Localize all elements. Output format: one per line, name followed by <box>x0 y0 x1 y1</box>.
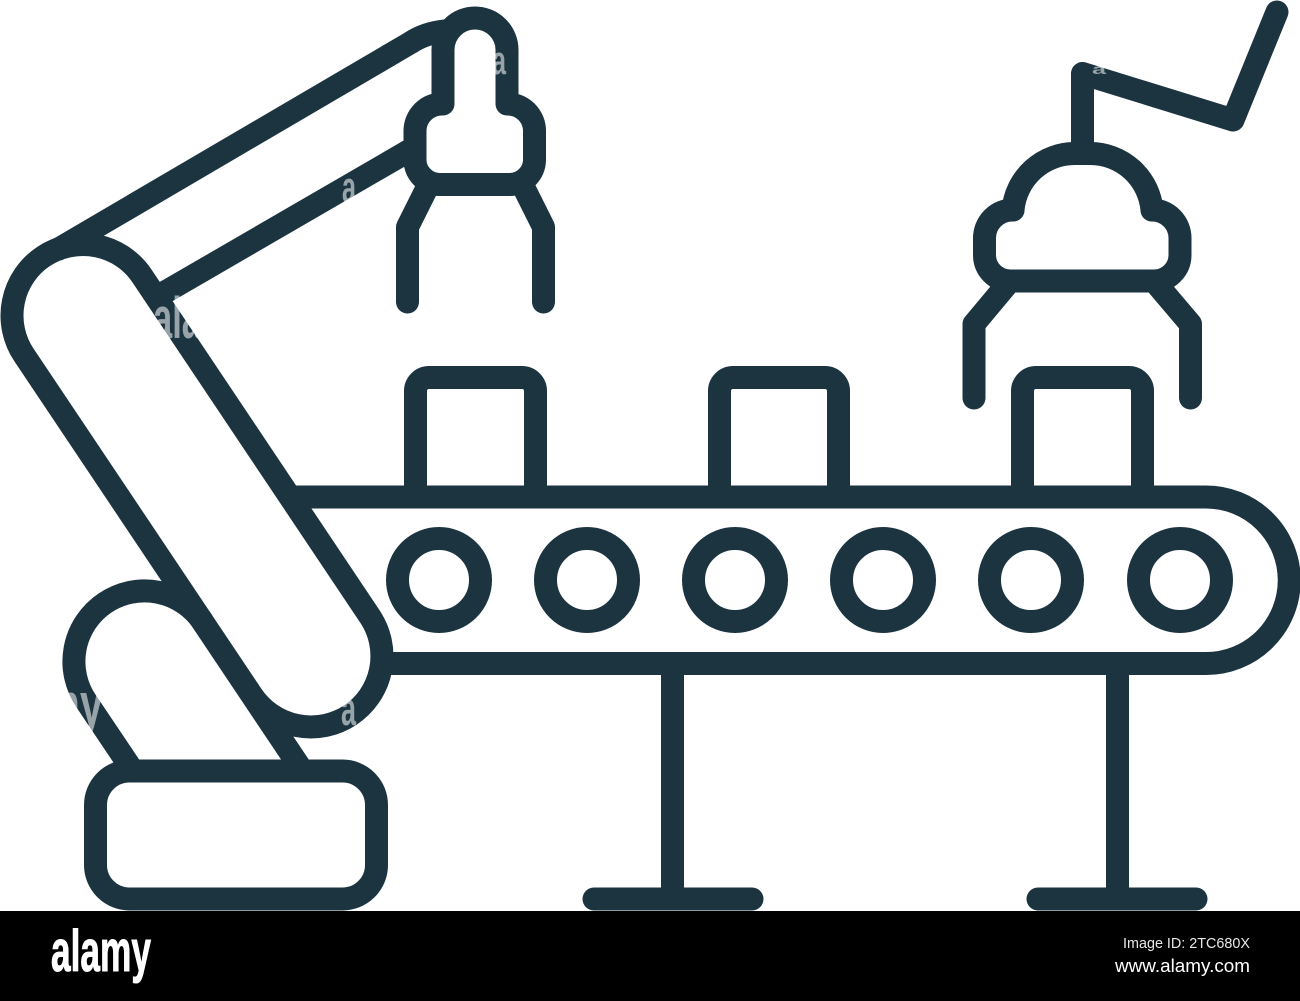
upper arm segment <box>56 31 445 298</box>
watermark fragments: ala <box>153 286 201 351</box>
left gripper head <box>415 18 534 184</box>
watermark fragments: a <box>492 39 506 83</box>
icon: robotic arm <box>12 18 544 899</box>
left gripper claws <box>408 186 544 302</box>
watermark fragments: a <box>341 682 356 735</box>
footer logo: alamy <box>51 919 151 984</box>
conveyor stand left <box>594 664 752 899</box>
main arm capsule with strut to base <box>12 244 382 771</box>
package boxes <box>416 378 1142 497</box>
conveyor stand right <box>1038 664 1196 899</box>
gripper claws <box>974 281 1190 398</box>
watermark fragments: my <box>43 671 103 738</box>
image id: Image ID: 2TC680X <box>1123 935 1250 952</box>
belt outline <box>290 497 1289 664</box>
icon: overhead robot gripper <box>974 12 1277 398</box>
rollers <box>398 538 1222 622</box>
watermark fragments <box>43 39 1106 738</box>
gripper cable <box>1082 12 1277 153</box>
footer bar <box>0 911 1300 1001</box>
gripper body <box>984 210 1180 281</box>
gripper dome <box>1013 153 1152 210</box>
watermark fragments: a <box>1092 61 1106 77</box>
watermark fragments: a <box>342 163 356 212</box>
website: www.alamy.com <box>1114 956 1250 976</box>
icon: conveyor belt <box>290 378 1289 899</box>
arm base <box>96 771 376 899</box>
elbow joint <box>74 591 203 771</box>
